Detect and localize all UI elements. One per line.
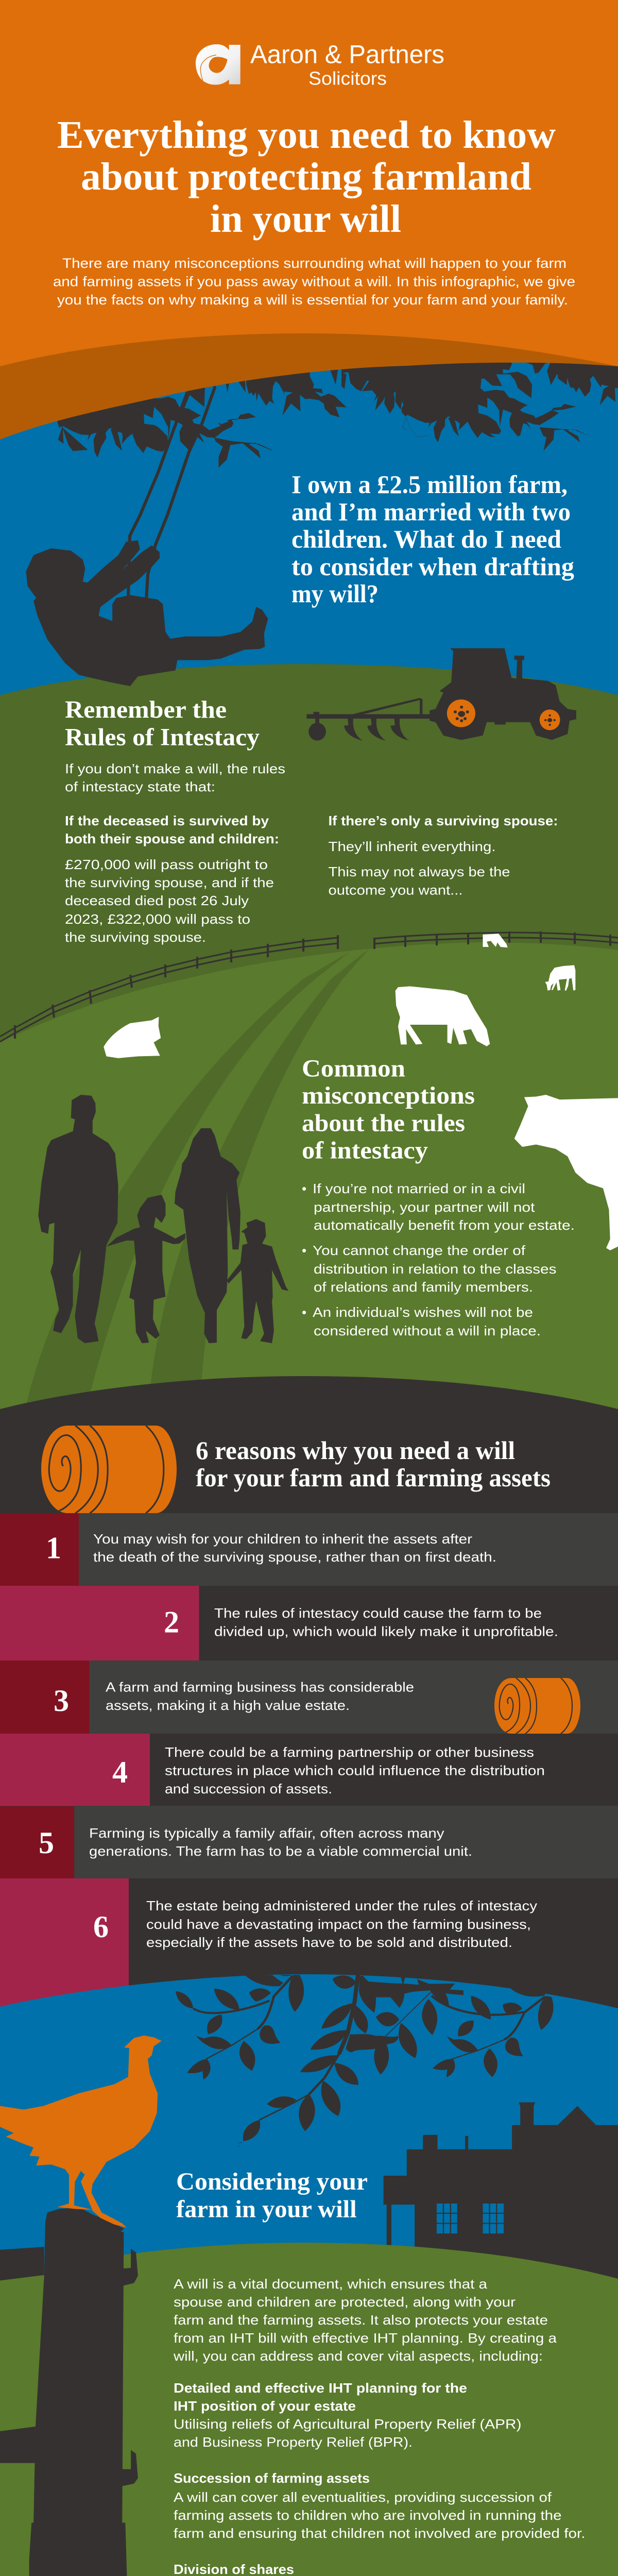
heading: Considering your farm	[176, 2168, 368, 2223]
reason 1: the death of the surviving spouse, rather than on first death.	[93, 1549, 496, 1565]
misconceptions bullet list: An individual’s wishes will not be	[313, 1304, 533, 1320]
aspect: IHT planning: Utilising reliefs of Agricultural Property Relief (APR)	[174, 2416, 521, 2432]
column: spouse and children: 2023, £322,000 will pass to	[65, 911, 250, 927]
reason 6: The estate being administered under the rules of intestacy	[146, 1898, 537, 1913]
sky: top section	[0, 355, 618, 721]
column: spouse and children: £270,000 will pass outright to	[65, 857, 268, 872]
aspect: succession: farming assets to children who are involved in running the	[174, 2507, 561, 2523]
header orange background	[0, 0, 618, 366]
intestacy intro text: of intestacy state that:	[65, 779, 215, 794]
will intro paragraph: will, you can address and cover vital aspects, including:	[173, 2348, 543, 2364]
will intro paragraph: A will is a vital document, which ensures that a	[174, 2276, 488, 2292]
heading: Considering your farm: Considering your	[176, 2168, 368, 2195]
question heading: children. What do I need	[291, 524, 561, 553]
column: only surviving spouse: They’ll inherit everything.	[329, 839, 495, 854]
question heading	[291, 470, 574, 608]
aspect: IHT planning: and Business Property Relief (BPR).	[174, 2434, 413, 2450]
reason 4: There could be a farming partnership or other business	[165, 1744, 534, 1760]
column: spouse and children: the surviving spouse, and if the	[65, 875, 274, 890]
question heading: to consider when drafting	[291, 552, 574, 581]
cow: small grazing far	[483, 934, 508, 947]
icon: large hay bale	[41, 1426, 177, 1513]
heading: 6 reasons	[196, 1436, 551, 1492]
reason 4: and succession of assets.	[165, 1781, 332, 1797]
main title: about protecting farmland	[81, 155, 531, 198]
field tracks	[26, 950, 369, 1408]
reason 4	[0, 1734, 618, 1806]
reason 6: 6	[93, 1910, 109, 1944]
column: spouse and children	[65, 813, 279, 945]
green hill background	[0, 664, 618, 1422]
will intro paragraph: farm and the farming assets. It also protects your estate	[174, 2312, 548, 2328]
intro text: There are many misconceptions surrounding what will happen to your farm	[62, 256, 566, 271]
reason 1: 1	[46, 1531, 61, 1565]
intestacy intro text: If you don’t make a will, the rules	[65, 761, 285, 776]
misconceptions bullet list: of relations and family members.	[314, 1279, 533, 1295]
reason 2: 2	[164, 1605, 179, 1639]
question heading: my will?	[291, 579, 379, 608]
intro text	[53, 256, 575, 308]
lighter green field	[0, 942, 618, 1422]
tiny stray label: Lore	[238, 2141, 243, 2144]
reason 1	[0, 1513, 618, 1586]
tractor and plough	[306, 648, 576, 740]
heading: 6 reasons: for your farm and farming assets	[196, 1463, 551, 1492]
icon: small hay bale	[494, 1678, 580, 1734]
column: spouse and children: both their spouse and children:	[65, 831, 279, 846]
will intro paragraph: from an IHT bill with effective IHT planning. By creating a	[174, 2330, 557, 2346]
swing ropes	[128, 387, 215, 600]
branch: right vine	[432, 1989, 548, 2015]
misconceptions bullet list	[302, 1181, 575, 1338]
cow: close-up right edge	[514, 1095, 618, 1250]
main title: in your will	[210, 197, 401, 241]
reason 4: 4	[112, 1755, 128, 1789]
intestacy intro text	[65, 761, 285, 794]
misconceptions bullet list: automatically benefit from your estate.	[314, 1217, 575, 1233]
tiny stray label: m	[238, 2145, 240, 2147]
heading: Common misconceptions: Common	[302, 1055, 405, 1082]
aspect: succession: farm and ensuring that children not involved are provided for.	[174, 2526, 585, 2541]
branch: left cluster	[176, 1975, 304, 2080]
question heading: I own a £2.5 million farm,	[291, 470, 568, 499]
branch: right cluster	[432, 1979, 556, 2094]
misconceptions bullet list: •	[302, 1304, 306, 1320]
column: spouse and children: deceased died post 26 July	[65, 893, 249, 908]
heading: Common misconceptions: of intestacy	[302, 1137, 428, 1164]
question heading: and I’m married with two	[291, 497, 571, 526]
fence: right	[373, 931, 618, 949]
column: only surviving spouse	[329, 813, 558, 897]
reason 2	[0, 1586, 618, 1660]
misconceptions bullet list: If you’re not married or in a civil	[313, 1181, 525, 1196]
heading: Considering your farm: farm in your will	[176, 2196, 357, 2223]
reason 2: divided up, which would likely make it unprofitable.	[214, 1624, 558, 1639]
cow: small grazing right	[545, 965, 575, 991]
tree canopy silhouette	[58, 359, 618, 467]
heading: 6 reasons: 6 reasons why you need a will	[196, 1436, 515, 1465]
reason 5	[0, 1806, 618, 1878]
green hill lower section	[0, 2243, 618, 2576]
reason 3: 3	[54, 1684, 69, 1718]
column: only surviving spouse: If there’s only a surviving spouse:	[329, 813, 558, 828]
logo: Aaron & Partners top	[196, 40, 444, 89]
reason 3	[0, 1660, 618, 1734]
fence: left	[0, 935, 338, 1042]
misconceptions bullet list: considered without a will in place.	[314, 1323, 541, 1338]
heading: Common misconceptions: misconceptions	[302, 1082, 475, 1109]
intro text: you the facts on why making a will is essential for your farm and your family.	[57, 292, 568, 308]
fence post and rails	[0, 2207, 138, 2576]
misconceptions bullet list: •	[302, 1181, 306, 1196]
reason 5: generations. The farm has to be a viable commercial unit.	[89, 1843, 472, 1859]
cow: grazing large	[396, 986, 490, 1046]
column: only surviving spouse: This may not always be the	[329, 864, 510, 879]
column: spouse and children: the surviving spouse.	[65, 929, 206, 945]
reason 3: A farm and farming business has considerable	[106, 1680, 414, 1695]
pheasant	[0, 2036, 162, 2228]
reason 6: could have a devastating impact on the farming business,	[146, 1917, 531, 1932]
family silhouette	[38, 1095, 288, 1343]
reason 6: especially if the assets have to be sold and distributed.	[146, 1935, 512, 1950]
misconceptions bullet list: distribution in relation to the classes	[314, 1261, 556, 1277]
dark band: 6 reasons section	[0, 1376, 618, 2014]
reason 5: Farming is typically a family affair, often across many	[89, 1825, 444, 1841]
aspect: succession: A will can cover all eventualities, providing succession of	[174, 2489, 552, 2505]
logo: Aaron & Partners top: Aaron & Partners	[250, 40, 444, 69]
sky: lower section	[0, 1974, 618, 2318]
aspect: succession	[174, 2470, 585, 2541]
aspect: IHT planning: Detailed and effective IHT planning for the	[174, 2380, 467, 2396]
will intro paragraph	[173, 2276, 557, 2364]
heading: Common misconceptions	[302, 1055, 475, 1164]
aspect: succession: Succession of farming assets	[174, 2470, 370, 2486]
reason 4: structures in place which could influence the distribution	[165, 1763, 545, 1778]
main title	[57, 113, 556, 241]
heading: Remember the Rules of Intestacy	[65, 696, 260, 751]
main title: Everything you need to know	[57, 113, 556, 157]
reason 5: 5	[39, 1826, 54, 1860]
child on swing silhouette	[26, 540, 268, 686]
header dark orange curved band	[0, 330, 618, 439]
heading: Remember the Rules of Intestacy: Remember the	[65, 696, 227, 723]
heading: Remember the Rules of Intestacy: Rules of Intestacy	[65, 724, 260, 751]
intro text: and farming assets if you pass away without a will. In this infographic, we give	[53, 274, 575, 290]
farmhouse silhouette	[384, 2103, 618, 2283]
misconceptions bullet list: •	[302, 1243, 306, 1258]
misconceptions bullet list: You cannot change the order of	[313, 1243, 526, 1258]
reason 1: You may wish for your children to inherit the assets after	[93, 1531, 472, 1547]
column: spouse and children: If the deceased is survived by	[65, 813, 269, 828]
will intro paragraph: spouse and children are protected, along with your	[174, 2294, 516, 2310]
aspect: IHT planning	[174, 2380, 521, 2450]
cow: lying down	[104, 1016, 161, 1058]
logo: Aaron & Partners top: Solicitors	[308, 68, 387, 89]
reason 2: The rules of intestacy could cause the farm to be	[214, 1605, 542, 1621]
reason 6	[0, 1878, 618, 2012]
misconceptions bullet list: partnership, your partner will not	[314, 1199, 535, 1215]
aspect: IHT planning: IHT position of your estate	[174, 2398, 356, 2414]
tiny stray label	[238, 2141, 243, 2147]
heading: Common misconceptions: about the rules	[302, 1110, 465, 1137]
column: only surviving spouse: outcome you want...	[329, 882, 462, 897]
reason 3: assets, making it a high value estate.	[106, 1698, 350, 1713]
branch: centre cluster	[243, 1975, 464, 2141]
